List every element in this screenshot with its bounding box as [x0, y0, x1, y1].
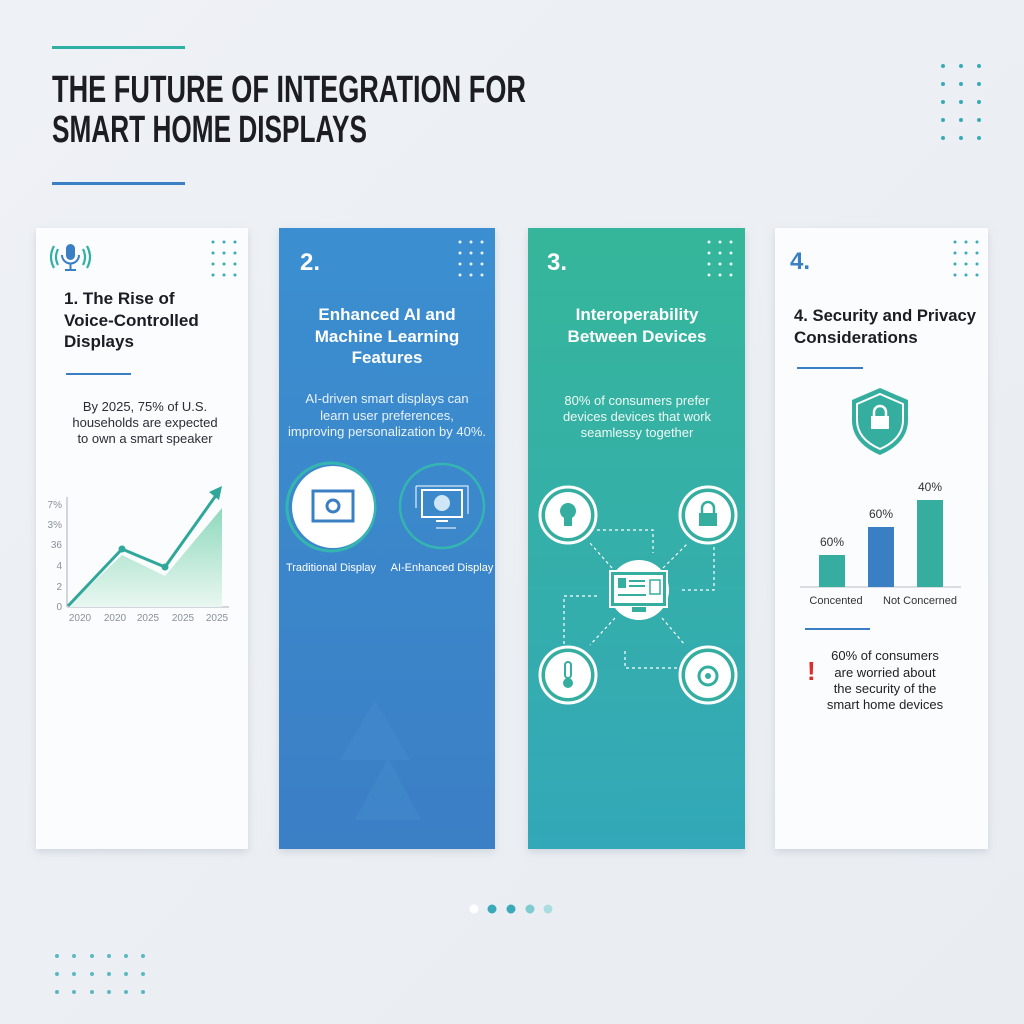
text block: By 2025, 75% of U.S. [83, 399, 207, 414]
line chart: 4 [56, 561, 62, 572]
panel: security and privacy [775, 228, 988, 849]
network diagram [540, 487, 736, 703]
heading: 1. The Rise of [64, 289, 175, 308]
line chart: 3% [48, 520, 62, 531]
heading: Voice-Controlled [64, 311, 199, 330]
icon: robot vacuum [680, 647, 736, 703]
callout: ! [807, 656, 816, 686]
line chart: 7% [48, 500, 62, 511]
panel: interoperability [528, 228, 745, 849]
callout: the security of the [834, 681, 936, 696]
heading: Between Devices [568, 327, 706, 346]
icon: bulb [540, 487, 596, 543]
bar chart [800, 480, 961, 607]
heading: Machine Learning [315, 327, 459, 346]
text block: devices devices that work [563, 409, 712, 424]
line chart: 2025 [172, 613, 195, 624]
text block: to own a smart speaker [77, 431, 213, 446]
heading: Interoperability [576, 305, 699, 324]
text block: 80% of consumers prefer [564, 393, 710, 408]
heading: Displays [64, 332, 134, 351]
line chart: 36 [51, 540, 62, 551]
panel: security and privacy: 4. [790, 248, 810, 275]
icon: AI-enhanced display: AI-Enhanced Display [391, 562, 494, 574]
decorative dots bottom left [55, 954, 145, 994]
icon: thermometer [540, 647, 596, 703]
title [52, 46, 526, 185]
text block: AI-driven smart displays can [305, 391, 469, 406]
icon: AI-enhanced display [391, 464, 494, 574]
panel: interoperability: 3. [547, 249, 567, 276]
icon: traditional display: Traditional Display [286, 562, 377, 574]
heading: Considerations [794, 328, 918, 347]
decorative dots top right [941, 64, 981, 140]
text block: learn user preferences, [320, 408, 454, 423]
panel: enhanced AI: 2. [300, 249, 320, 276]
line chart: 2 [56, 582, 62, 593]
bar chart: 60% [869, 507, 893, 521]
icon: shield [852, 388, 908, 455]
icon: traditional display [286, 463, 377, 574]
bar chart: 40% [918, 480, 942, 494]
line chart: 2020 [69, 613, 92, 624]
line chart: 2025 [206, 613, 229, 624]
text block: improving personalization by 40%. [288, 424, 486, 439]
heading: Features [352, 348, 422, 367]
pagination dots [470, 904, 552, 914]
callout: smart home devices [827, 697, 944, 712]
callout [807, 648, 944, 712]
heading: Enhanced AI and [318, 305, 456, 324]
text block: seamlessy together [581, 425, 694, 440]
heading: 4. Security and Privacy [794, 306, 977, 325]
line chart: 0 [56, 602, 62, 613]
bar chart: Concented [809, 595, 863, 607]
line chart: 2025 [137, 613, 160, 624]
panel: enhanced AI [279, 228, 495, 849]
line chart [48, 486, 229, 624]
bar chart: 60% [820, 535, 844, 549]
line chart: 2020 [104, 613, 127, 624]
bar chart: Not Concerned [883, 595, 957, 607]
icon: lock [680, 487, 736, 543]
panel: voice-controlled displays [36, 228, 248, 849]
text block: households are expected [72, 415, 218, 430]
title: SMART HOME DISPLAYS [52, 109, 367, 151]
icon: microphone [51, 244, 90, 270]
callout: 60% of consumers [831, 648, 939, 663]
callout: are worried about [834, 665, 936, 680]
title: THE FUTURE OF INTEGRATION FOR [52, 69, 526, 111]
